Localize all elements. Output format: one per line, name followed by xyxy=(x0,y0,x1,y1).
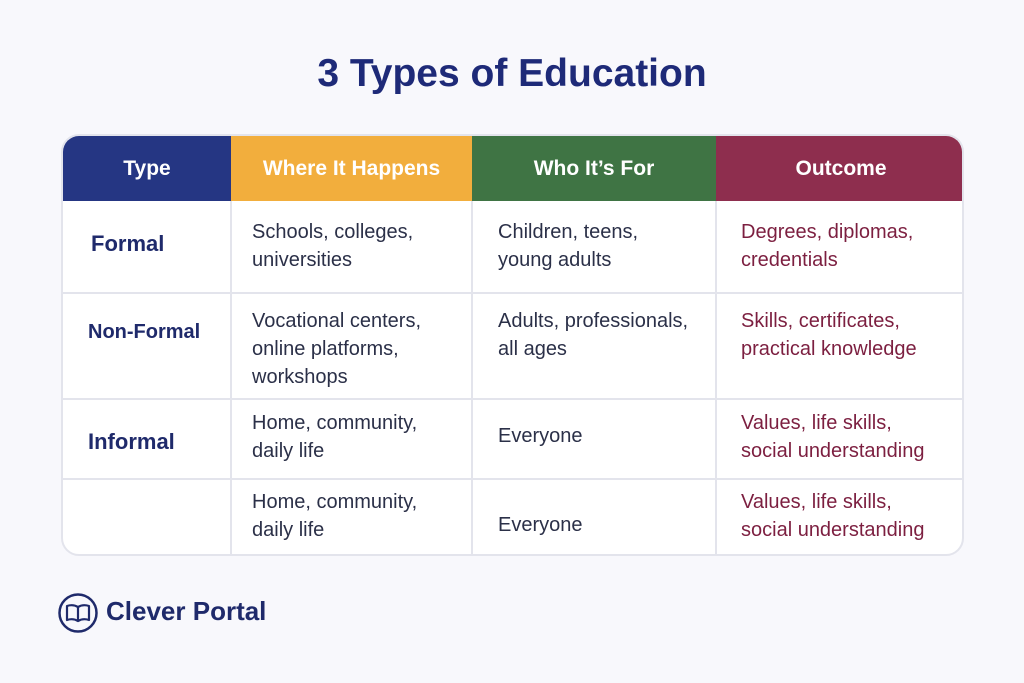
row: Non-Formal: all ages xyxy=(498,338,567,360)
row: Formal: credentials xyxy=(741,249,838,271)
row: Non-Formal: practical knowledge xyxy=(741,338,917,360)
header: Who It's For xyxy=(472,136,716,201)
table xyxy=(61,134,964,556)
row: extra: Values, life skills, xyxy=(741,491,892,513)
row: Non-Formal: Skills, certificates, xyxy=(741,310,900,332)
row: extra: daily life xyxy=(252,519,324,541)
row: Formal: young adults xyxy=(498,249,611,271)
logo xyxy=(58,593,266,633)
header: Outcome xyxy=(716,136,966,201)
row: extra: Home, community, xyxy=(252,491,417,513)
row: Formal: Schools, colleges, xyxy=(252,221,413,243)
row: extra: social understanding xyxy=(741,519,924,541)
row: Non-Formal: workshops xyxy=(252,366,348,388)
header: Where It Happens xyxy=(231,136,472,201)
header: Type xyxy=(63,136,231,201)
row: Formal: Children, teens, xyxy=(498,221,638,243)
header: Who It's For: Who It’s For xyxy=(534,156,654,180)
row: Non-Formal: Vocational centers, xyxy=(252,310,421,332)
row: Informal: Values, life skills, xyxy=(741,412,892,434)
row: extra: Everyone xyxy=(498,514,582,536)
row: Informal: Home, community, xyxy=(252,412,417,434)
icon: book xyxy=(58,593,98,633)
row: Formal: Formal xyxy=(91,231,164,256)
header: Type: Type xyxy=(123,156,171,180)
brand name: Clever Portal xyxy=(106,596,266,626)
row: Formal xyxy=(91,221,913,271)
title: 3 Types of Education xyxy=(317,52,707,95)
row: Non-Formal: online platforms, xyxy=(252,338,399,360)
row: Formal: universities xyxy=(252,249,352,271)
row: Non-Formal xyxy=(88,310,917,388)
row: Informal: social understanding xyxy=(741,440,924,462)
row: Informal xyxy=(88,412,924,462)
row: Informal: Everyone xyxy=(498,425,582,447)
row: Informal: daily life xyxy=(252,440,324,462)
row: Informal: Informal xyxy=(88,429,175,454)
row: Formal: Degrees, diplomas, xyxy=(741,221,913,243)
row: extra xyxy=(252,491,924,541)
row: Non-Formal: Non-Formal xyxy=(88,321,200,343)
header: Outcome: Outcome xyxy=(795,156,886,180)
row: Non-Formal: Adults, professionals, xyxy=(498,310,688,332)
header: Where It Happens: Where It Happens xyxy=(263,156,440,180)
